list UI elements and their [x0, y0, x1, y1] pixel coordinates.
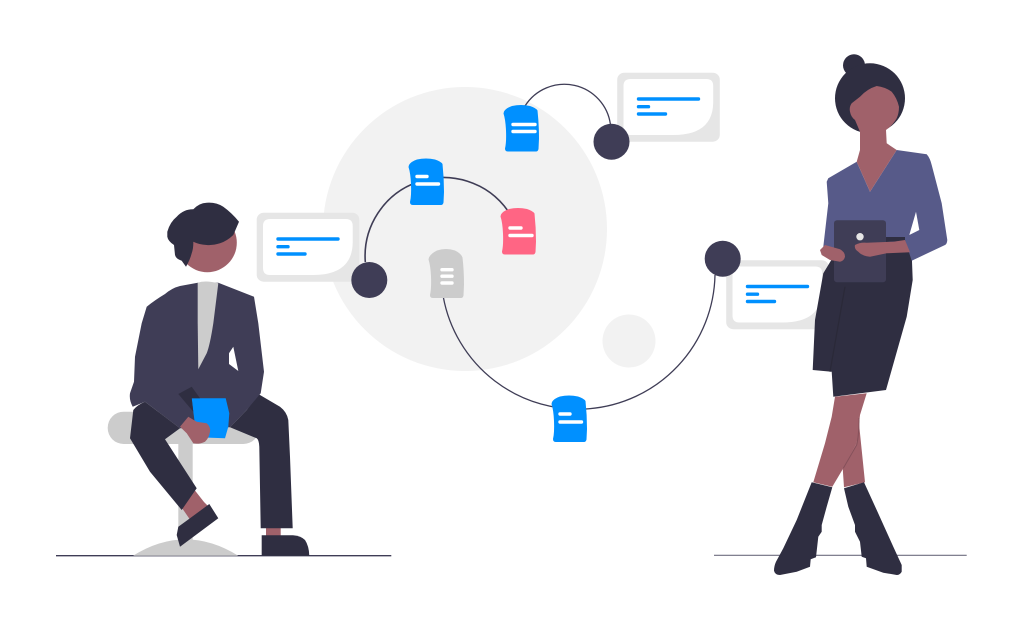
man: left shoe [177, 504, 218, 547]
man: shirt [198, 281, 218, 369]
man: hand [180, 417, 210, 444]
connector arc: top [525, 84, 610, 125]
woman: face and neck [850, 86, 899, 192]
woman: cuff [886, 237, 905, 242]
connector arc: bottom [443, 275, 715, 409]
man: far shin [182, 488, 212, 524]
woman: skirt fold [830, 287, 845, 372]
man: jacket [130, 283, 264, 428]
message card: top right [617, 73, 720, 142]
woman: hair [835, 63, 905, 133]
man: blue document [192, 398, 229, 438]
stool [108, 412, 259, 556]
document: grey [428, 249, 464, 298]
message card: left [257, 213, 359, 282]
woman: right hand [855, 240, 910, 257]
connector arc: left [365, 178, 508, 262]
woman: blouse [823, 150, 947, 261]
man: near ankle [266, 526, 281, 537]
node: right [705, 241, 741, 277]
man: right leg [230, 394, 293, 528]
document: top blue [504, 105, 539, 152]
woman: legs [813, 393, 867, 487]
man: left leg [130, 402, 197, 510]
seated man [130, 203, 309, 556]
woman: left hand [820, 245, 845, 262]
document: middle blue [408, 158, 444, 205]
node: top [594, 124, 630, 160]
large background circle [323, 87, 607, 371]
node: left [351, 262, 387, 298]
man: hair [167, 203, 239, 267]
ground line: right [714, 554, 967, 556]
woman: tablet button [856, 233, 864, 240]
man: head [178, 213, 237, 272]
man: right shoe [262, 535, 309, 556]
woman: right boot [844, 482, 902, 575]
document: pink [500, 208, 536, 254]
woman: skirt [813, 239, 913, 397]
woman: hair bun [843, 54, 865, 76]
woman: left boot [774, 482, 832, 575]
woman: blouse gap [909, 212, 919, 235]
ground line: left [56, 555, 391, 557]
man: jacket gap [229, 347, 238, 371]
man: cuff [178, 387, 200, 412]
woman: tablet [834, 220, 886, 282]
message card: right [726, 260, 829, 329]
small background circle [602, 314, 656, 368]
standing woman [774, 54, 947, 575]
document: bottom blue [552, 396, 587, 442]
